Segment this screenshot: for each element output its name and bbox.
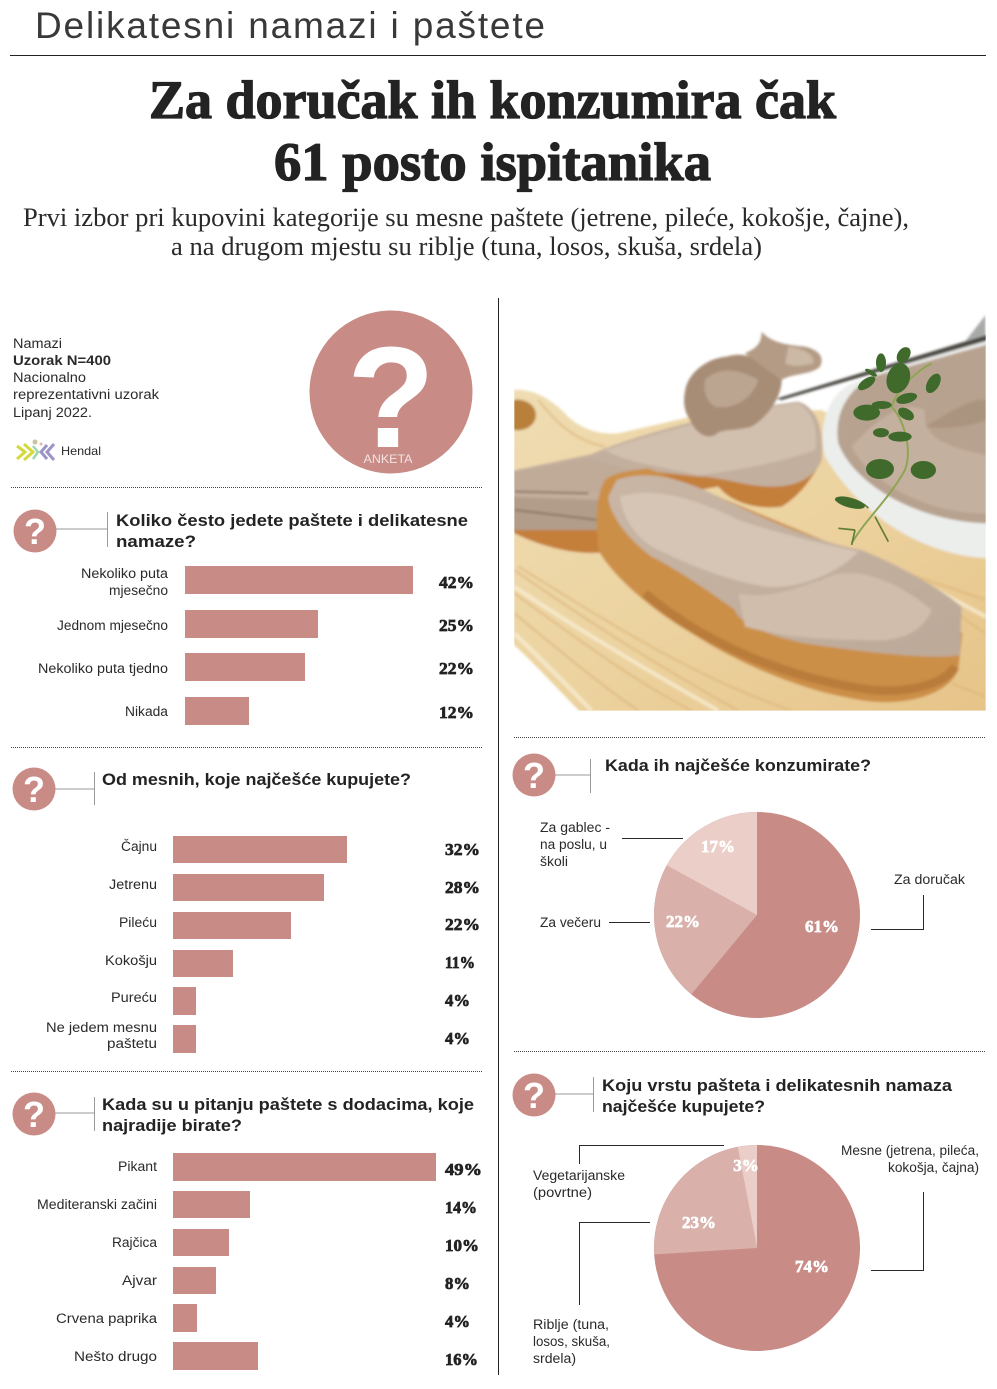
heading: additions	[12, 1092, 474, 1136]
callout: lunch: Za gablec -	[540, 820, 610, 835]
bar: once a month: 25%	[439, 616, 474, 635]
icon: big survey question circle	[310, 310, 472, 478]
back bread slice	[514, 470, 816, 554]
bar: Crvena paprika	[56, 1304, 470, 1332]
heading: how often: ?	[24, 511, 46, 552]
bar: Ajvar	[122, 1267, 470, 1294]
bar: Pileću: Pileću	[119, 915, 157, 930]
heading: type of pate: najčešće kupujete?	[602, 1097, 765, 1116]
pie chart: type of pate: 74%	[795, 1257, 829, 1276]
survey info text: Lipanj 2022.	[13, 405, 92, 420]
callout: dinner	[540, 915, 650, 930]
heading: additions: najradije birate?	[102, 1116, 242, 1135]
heading: how often	[14, 510, 468, 552]
bar: Nešto drugo: 16%	[445, 1350, 478, 1369]
survey info text: Nacionalno	[13, 370, 86, 385]
bar: Pileću	[119, 912, 480, 939]
survey info text: Namazi	[13, 336, 62, 351]
bar: Rajčica: Rajčica	[112, 1235, 157, 1250]
heading: meat pates: Od mesnih, koje najčešće kupujete?	[102, 770, 411, 789]
callout: meat	[841, 1143, 979, 1270]
pie chart: type of pate: 3%	[733, 1156, 759, 1175]
bar: Crvena paprika: 4%	[445, 1312, 470, 1331]
bar: several times a month: Nekoliko puta	[81, 566, 169, 581]
photo: pate on bread	[499, 315, 992, 717]
bar: several times a month: 42%	[439, 573, 474, 592]
subtitle: Prvi izbor pri kupovini kategorije su mesne paštete (jetrene, pileće, kokošje, čajne),	[23, 203, 909, 232]
heading: type of pate: ?	[523, 1075, 545, 1116]
logo: Hendal: Hendal	[61, 444, 101, 458]
callout: vegetarian: (povrtne)	[533, 1185, 592, 1200]
icon: big survey question circle: ANKETA	[364, 454, 413, 466]
bar: several times a week: Nekoliko puta tjedno	[38, 661, 168, 676]
bar: Pikant: Pikant	[118, 1159, 157, 1174]
bar: Mediteranski začini	[37, 1191, 477, 1218]
title	[149, 70, 836, 192]
panel: when consumed	[512, 754, 965, 1018]
survey info text: Uzorak N=400	[13, 353, 111, 368]
heading: when consumed: ?	[523, 755, 545, 796]
callout: breakfast	[871, 872, 965, 930]
callout: dinner: Za večeru	[540, 915, 601, 930]
pie chart: when consumed: 17%	[701, 837, 735, 856]
bar: Nešto drugo	[74, 1342, 478, 1370]
heading: how often: namaze?	[116, 532, 196, 551]
subtitle: a na drugom mjestu su riblje (tuna, losos, skuša, srdela)	[171, 232, 762, 261]
bar: Jetrenu: 28%	[445, 878, 480, 897]
title: Za doručak ih konzumira čak	[149, 70, 836, 130]
bar: Ajvar: Ajvar	[122, 1273, 158, 1288]
bar: Crvena paprika: Crvena paprika	[56, 1311, 158, 1326]
callout: vegetarian: Vegetarijanske	[533, 1168, 625, 1183]
bar: Pureću: 4%	[445, 991, 470, 1010]
callout: meat: kokošja, čajna)	[888, 1160, 979, 1175]
icon: big survey question circle: ?	[347, 317, 435, 478]
bar: several times a month	[81, 566, 474, 598]
bar: Mediteranski začini: 14%	[445, 1198, 477, 1217]
front bread crust	[597, 468, 962, 702]
front slice spread	[608, 475, 962, 657]
bar: Rajčica	[112, 1229, 479, 1256]
bar: Pikant: 49%	[445, 1160, 482, 1179]
title: 61 posto ispitanika	[274, 132, 711, 192]
callout: vegetarian	[533, 1146, 724, 1200]
bar: no meat pate: 4%	[445, 1029, 470, 1048]
bar: several times a week: 22%	[439, 659, 474, 678]
survey info text: reprezentativni uzorak	[13, 387, 159, 402]
bar: Ajvar: 8%	[445, 1274, 470, 1293]
heading: meat pates	[12, 768, 411, 810]
subtitle	[23, 203, 909, 261]
callout: fish: srdela)	[533, 1351, 576, 1366]
heading: type of pate: Koju vrstu pašteta i delikatesnih namaza	[602, 1076, 953, 1095]
callout: fish: Riblje (tuna,	[533, 1317, 609, 1332]
bar: Kokošju: 11%	[445, 953, 475, 972]
heading: when consumed	[512, 754, 871, 796]
bar: Pureću	[111, 987, 470, 1015]
pie chart: when consumed: 22%	[666, 912, 700, 931]
bowl	[822, 333, 992, 558]
survey info text	[13, 336, 159, 420]
pie chart: when consumed	[654, 812, 860, 1018]
bar: Čajnu: Čajnu	[121, 839, 157, 854]
knife	[777, 333, 992, 400]
bar: no meat pate: Ne jedem mesnu	[46, 1020, 157, 1035]
panel: type of pate	[512, 1074, 979, 1366]
callout: lunch: na poslu, u	[540, 837, 607, 852]
heading: meat pates: ?	[23, 769, 45, 810]
bar: no meat pate	[46, 1020, 470, 1053]
spooned pate	[684, 355, 782, 436]
bar: several times a month: mjesečno	[109, 583, 168, 598]
bar: Kokošju	[105, 950, 475, 977]
bar: no meat pate: paštetu	[107, 1036, 157, 1051]
panel: pates with additions	[12, 1092, 482, 1370]
bar: Jetrenu	[109, 874, 480, 901]
heading: additions: Kada su u pitanju paštete s dodacima, koje	[102, 1095, 474, 1114]
callout: breakfast: Za doručak	[894, 872, 965, 887]
pie chart: type of pate	[654, 1145, 860, 1351]
bar: Jetrenu: Jetrenu	[109, 877, 157, 892]
callout: fish	[533, 1222, 650, 1366]
panel: meat pates	[12, 768, 480, 1053]
thyme sprig	[852, 363, 932, 543]
heading: type of pate	[512, 1074, 953, 1116]
bar: never	[125, 697, 474, 725]
heading: additions: ?	[23, 1094, 45, 1135]
callout: fish: losos, skuša,	[533, 1334, 610, 1349]
bar: Čajnu: 32%	[445, 840, 480, 859]
section header: Delikatesni namazi i paštete	[35, 5, 545, 46]
pie chart: when consumed: 61%	[805, 917, 839, 936]
heading: how often: Koliko često jedete paštete i delikatesne	[116, 511, 468, 530]
pie chart: type of pate: 23%	[682, 1213, 716, 1232]
bar: Rajčica: 10%	[445, 1236, 479, 1255]
bar: Pikant	[118, 1153, 482, 1181]
callout: lunch: školi	[540, 854, 568, 869]
bar: once a month: Jednom mjesečno	[57, 618, 168, 633]
bar: Mediteranski začini: Mediteranski začini	[37, 1197, 157, 1212]
heading: when consumed: Kada ih najčešće konzumirate?	[605, 756, 871, 775]
bar: Nešto drugo: Nešto drugo	[74, 1349, 157, 1364]
panel: how often	[14, 510, 474, 725]
callout: lunch	[540, 820, 683, 869]
callout: meat: Mesne (jetrena, pileća,	[841, 1143, 979, 1158]
bar: never: 12%	[439, 703, 474, 722]
cutting board	[508, 390, 992, 717]
bar: Pileću: 22%	[445, 915, 480, 934]
bar: Kokošju: Kokošju	[105, 953, 157, 968]
logo: Hendal	[17, 440, 101, 460]
bar: several times a week	[38, 653, 474, 681]
bar: once a month	[57, 610, 474, 638]
bar: Čajnu	[121, 836, 480, 863]
bar: never: Nikada	[125, 704, 168, 719]
bar: Pureću: Pureću	[111, 990, 157, 1005]
